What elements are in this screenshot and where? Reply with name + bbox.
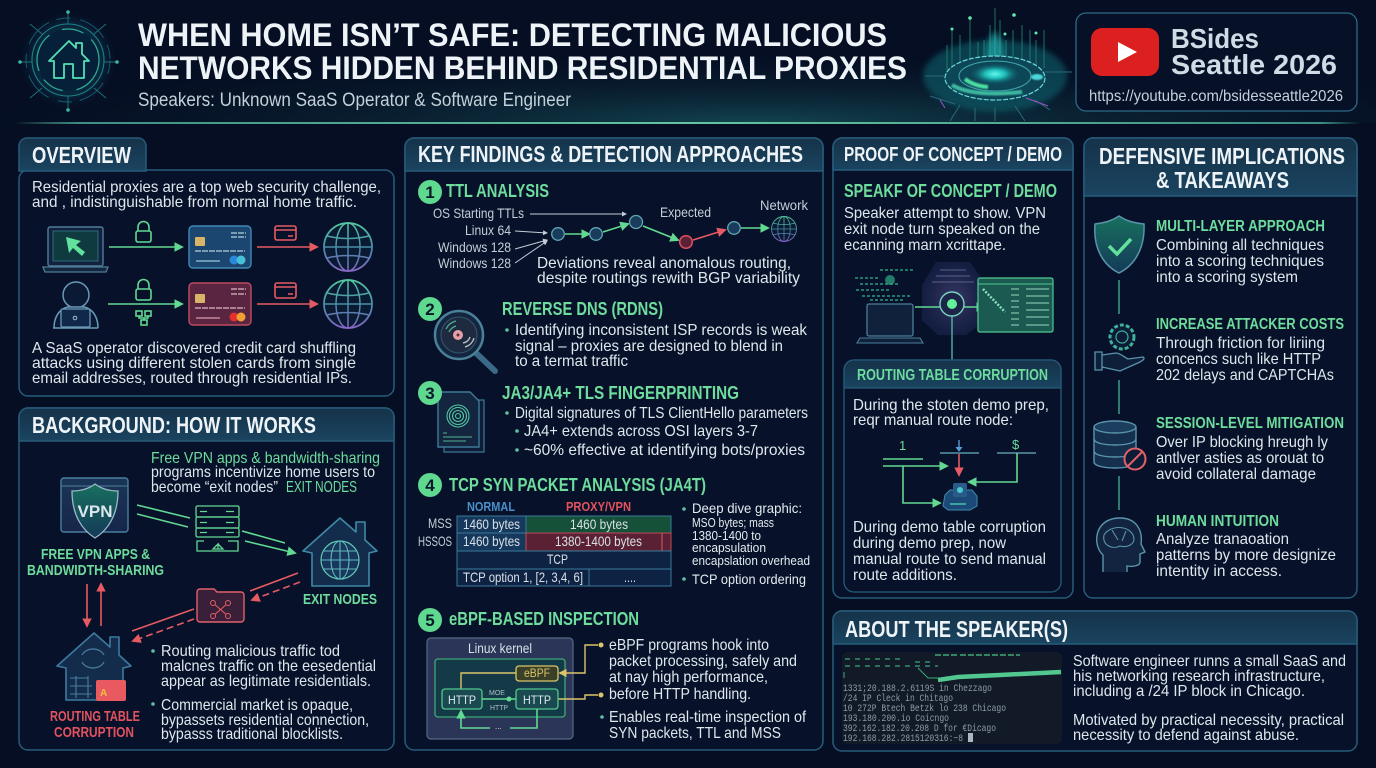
routing text bottom bbox=[853, 519, 1046, 584]
tls text bbox=[505, 405, 808, 459]
ebpf notes: before HTTP handling. bbox=[609, 686, 751, 703]
overview intro text: Residential proxies are a top web security challenge, bbox=[32, 179, 381, 196]
bullet: routing malicious traffic: appear as legitimate residentials. bbox=[161, 673, 371, 690]
finding 5: eBPF inspection bbox=[418, 608, 806, 742]
label: routing table corruption: ROUTING TABLE bbox=[50, 708, 140, 725]
channel name: BSides bbox=[1171, 23, 1259, 54]
table: normal vs proxy: 1380-1400 bytes bbox=[555, 533, 642, 549]
speaker bio: his networking research infrastructure, bbox=[1073, 668, 1325, 685]
heading: defensive implications: & TAKEAWAYS bbox=[1156, 167, 1289, 193]
routing text top: During the stoten demo prep, bbox=[853, 397, 1049, 414]
table: normal vs proxy: TCP option 1, [2, 3,4, 6] bbox=[463, 569, 583, 585]
bullet: commercial market: bypassets residential connection, bbox=[161, 712, 369, 729]
arrow: up and down exchange bbox=[87, 584, 101, 626]
badge 5 bbox=[418, 608, 442, 632]
diagram: linux kernel: HTTP bbox=[448, 693, 476, 707]
icon: laptop with cursor bbox=[43, 227, 108, 272]
icon: house in circuit ring bbox=[18, 10, 119, 112]
heading: about bbox=[833, 611, 1357, 644]
badge 2 bbox=[418, 297, 442, 321]
ebpf notes: at nay high performance, bbox=[609, 669, 768, 686]
badge 1 bbox=[418, 180, 442, 204]
subpanel: routing table corruption bbox=[844, 360, 1061, 592]
overview intro text: and , indistinguishable from normal home traffic. bbox=[32, 194, 357, 211]
heading: eBPF: eBPF-BASED INSPECTION bbox=[449, 609, 639, 629]
takeaway text: antlver asties as orouat to bbox=[1156, 450, 1324, 467]
takeaway text: MULTI-LAYER APPROACH bbox=[1156, 218, 1325, 235]
bullet: commercial market bbox=[151, 697, 369, 743]
badge 3 bbox=[418, 381, 442, 405]
ebpf notes: Enables real-time inspection of bbox=[609, 709, 806, 726]
tcp notes: TCP option ordering bbox=[692, 571, 806, 587]
TTL labels: Linux 64 bbox=[465, 222, 511, 238]
routing text top bbox=[853, 397, 1049, 429]
icon: fingerprint document bbox=[438, 392, 484, 452]
TTL labels: OS Starting TTLs bbox=[433, 205, 524, 221]
TTL labels: Network bbox=[760, 197, 809, 213]
tcp notes: encapslation overhead bbox=[692, 553, 810, 568]
overview intro text bbox=[32, 179, 381, 211]
title: WHEN HOME ISN’T SAFE: DETECTING MALICIOUS bbox=[138, 17, 887, 53]
routing text top: reqr manual route node: bbox=[853, 412, 1013, 429]
icon: small red card bbox=[275, 283, 296, 298]
badge 5: 5 bbox=[425, 611, 435, 630]
takeaway text: concencs such like HTTP bbox=[1156, 351, 1321, 368]
speaker bio bbox=[1073, 653, 1346, 744]
arrow: user to card bbox=[108, 303, 182, 305]
subheading: routing table corruption bbox=[844, 360, 1061, 388]
TTL explanation: Deviations reveal anomalous routing, bbox=[537, 255, 791, 272]
icon: lock bbox=[136, 280, 151, 300]
TTL labels bbox=[433, 197, 809, 271]
icon: globe bbox=[324, 280, 372, 328]
icon: blue credit card bbox=[189, 226, 251, 268]
icon: database blocked bbox=[1094, 421, 1146, 470]
icon: user at laptop bbox=[53, 282, 98, 328]
intro text: Free VPN apps & bandwidth-sharing bbox=[151, 450, 380, 467]
intro text bbox=[151, 450, 380, 496]
icon: maroon credit card bbox=[189, 283, 251, 325]
speaker bio: Motivated by practical necessity, practical bbox=[1073, 712, 1344, 729]
demo text bbox=[844, 205, 1046, 254]
panel: YouTube channel bbox=[1076, 13, 1357, 111]
terminal screenshot: /24 IP Cleck in Chitago bbox=[843, 693, 953, 705]
intro text: become “exit nodes” bbox=[151, 479, 278, 496]
takeaway text bbox=[1156, 415, 1344, 483]
icon: globe bbox=[324, 223, 372, 271]
diagram: linux kernel: HTTP bbox=[523, 693, 551, 707]
TTL explanation bbox=[537, 255, 800, 287]
takeaway text: Combining all techniques bbox=[1156, 237, 1324, 254]
heading: defensive implications bbox=[1084, 138, 1357, 196]
channel url: https://youtube.com/bsidesseattle2026 bbox=[1089, 88, 1343, 105]
tcp notes: encapsulation bbox=[692, 540, 766, 555]
table: normal vs proxy: PROXY/VPN bbox=[566, 499, 631, 514]
overview finding text: email addresses, routed through residential IPs. bbox=[32, 370, 352, 387]
icon: corrupted routing house: A bbox=[100, 688, 107, 699]
icon: small red card bbox=[275, 226, 296, 240]
subtitle: speakers: Speakers: Unknown SaaS Operator & Software Engineer bbox=[138, 90, 572, 111]
diagram: linux kernel: ... bbox=[495, 722, 502, 731]
takeaway text: into a scoring techniques bbox=[1156, 253, 1324, 270]
icon: shield check bbox=[1095, 216, 1144, 273]
icon: network nodes bbox=[136, 311, 151, 325]
takeaway text: avoid collateral damage bbox=[1156, 466, 1316, 483]
icon: play button bbox=[1091, 28, 1159, 76]
arrow: VPN to server bbox=[137, 505, 190, 527]
icon: head with brain bbox=[1097, 518, 1145, 572]
takeaway text bbox=[1156, 218, 1325, 286]
takeaway text: 202 delays and CAPTCHAs bbox=[1156, 367, 1334, 384]
icon: gear on hand bbox=[1095, 325, 1144, 371]
takeaway text: Over IP blocking hreugh ly bbox=[1156, 434, 1328, 451]
heading: proof of concept: PROOF OF CONCEPT / DEMO bbox=[844, 144, 1062, 166]
demo text: Speaker attempt to show. VPN bbox=[844, 205, 1046, 222]
arrow: card to globe bbox=[257, 303, 317, 305]
bullet: routing malicious traffic: malcnes traffic on the eesedential bbox=[161, 658, 376, 675]
terminal screenshot: 10 272P Btech Betzk lo 238 Chicago bbox=[843, 703, 1006, 715]
rdns text: signal – proxies are designed to blend in bbox=[515, 338, 783, 355]
tcp notes: Deep dive graphic: bbox=[692, 500, 802, 516]
heading: overview bbox=[19, 138, 146, 171]
channel name bbox=[1171, 23, 1337, 80]
overview finding text: attacks using different stolen cards from single bbox=[32, 355, 356, 372]
badge 2: 2 bbox=[425, 300, 435, 319]
terminal screenshot: 192.168.282.2815120316:~8 bbox=[843, 733, 963, 745]
bullet: routing malicious traffic bbox=[151, 643, 376, 690]
diagram: linux kernel bbox=[427, 638, 604, 739]
diagram: linux kernel: Linux kernel bbox=[468, 640, 532, 656]
arrow: laptop to card bbox=[109, 246, 182, 248]
label: free vpn apps: FREE VPN APPS & bbox=[41, 546, 150, 563]
routing text bottom: route additions. bbox=[853, 567, 957, 584]
table: normal vs proxy: 1460 bytes bbox=[570, 516, 628, 532]
TTL explanation: despite routings rewith BGP variability bbox=[537, 270, 800, 287]
demo text: exit node turn speaked on the bbox=[844, 221, 1040, 238]
ebpf notes: eBPF programs hook into bbox=[609, 637, 769, 654]
rdns text bbox=[505, 322, 808, 370]
takeaway: multi-layer approach bbox=[1095, 216, 1325, 286]
ebpf notes: packet processing, safely and bbox=[609, 653, 797, 670]
diagram: route merge: 1 bbox=[899, 438, 906, 453]
speaker bio: including a /24 IP block in Chicago. bbox=[1073, 683, 1305, 700]
speaker bio: necessity to defend against abuse. bbox=[1073, 727, 1299, 744]
rdns text: Identifying inconsistent ISP records is weak bbox=[515, 322, 808, 339]
overview finding text bbox=[32, 340, 356, 387]
tcp notes: 1380-1400 to bbox=[692, 528, 761, 543]
TTL labels: Windows 128 bbox=[438, 255, 511, 271]
takeaway text bbox=[1156, 316, 1344, 384]
icon: exit node house bbox=[303, 518, 377, 586]
tls text: Digital signatures of TLS ClientHello parameters bbox=[515, 405, 808, 422]
table: normal vs proxy: HSSOS bbox=[418, 533, 452, 549]
table: normal vs proxy: TCP bbox=[547, 551, 568, 567]
bullet: commercial market: bypasss traditional blocklists. bbox=[161, 726, 343, 743]
finding 4: TCP SYN analysis bbox=[418, 473, 810, 587]
diagram: linux kernel: eBPF bbox=[524, 666, 550, 680]
takeaway text: SESSION-LEVEL MITIGATION bbox=[1156, 415, 1344, 432]
panel: overview bbox=[19, 138, 394, 396]
header band glow bbox=[0, 0, 1376, 123]
subheading: demo: SPEAKF OF CONCEPT / DEMO bbox=[844, 181, 1057, 201]
diagram: linux kernel: HTTP bbox=[490, 705, 508, 712]
table: normal vs proxy: 1460 bytes bbox=[463, 533, 520, 549]
takeaway text: HUMAN INTUITION bbox=[1156, 513, 1279, 530]
diagram: route merge: $ bbox=[1012, 437, 1020, 452]
badge 4 bbox=[418, 473, 442, 497]
label: routing table corruption: CORRUPTION bbox=[54, 724, 134, 741]
diagram: linux kernel: MOE bbox=[489, 690, 505, 697]
icon: corrupted routing house bbox=[57, 633, 131, 701]
heading: reverse DNS: REVERSE DNS (RDNS) bbox=[502, 299, 663, 319]
takeaway: increase attacker costs bbox=[1095, 316, 1344, 384]
panel: about the speakers bbox=[833, 611, 1357, 751]
label: free vpn apps bbox=[27, 546, 164, 579]
illustration: demo laptop to exit node bbox=[855, 262, 1053, 360]
ebpf notes bbox=[600, 637, 806, 742]
title: NETWORKS HIDDEN BEHIND RESIDENTIAL PROXIES bbox=[138, 50, 907, 86]
tcp notes: MSO bytes; mass bbox=[692, 515, 774, 530]
title bbox=[138, 17, 907, 86]
icon: server rack bbox=[196, 506, 239, 551]
terminal screenshot: 193.180.200.io Coicngo bbox=[843, 713, 949, 725]
diagram: route merge bbox=[883, 437, 1036, 510]
ebpf notes: SYN packets, TTL and MSS bbox=[609, 725, 781, 742]
label: routing table corruption bbox=[50, 708, 140, 741]
finding 2: reverse DNS bbox=[418, 297, 808, 371]
badge 3: 3 bbox=[425, 384, 435, 403]
table: normal vs proxy: NORMAL bbox=[467, 499, 515, 514]
TTL labels: Expected bbox=[660, 204, 711, 220]
table: normal vs proxy bbox=[418, 499, 671, 586]
heading: overview: OVERVIEW bbox=[32, 142, 131, 168]
heading: key findings: KEY FINDINGS & DETECTION APPROACHES bbox=[418, 141, 803, 167]
terminal screenshot: 392.162.182.20.208 D for €Dicago bbox=[843, 723, 996, 735]
channel name: Seattle 2026 bbox=[1171, 49, 1337, 80]
bullet: commercial market: Commercial market is opaque, bbox=[161, 697, 353, 714]
arrow: exit nodes to folder bbox=[250, 573, 300, 600]
takeaway text: intentity in access. bbox=[1156, 563, 1282, 580]
finding 1: TTL analysis bbox=[418, 180, 809, 287]
arrow: folder to routing table bbox=[132, 609, 194, 641]
table: normal vs proxy: .... bbox=[624, 569, 636, 585]
label: exit nodes: EXIT NODES bbox=[303, 591, 377, 608]
TTL hop path chart bbox=[515, 214, 796, 263]
TTL labels: Windows 128 bbox=[438, 239, 511, 255]
heading: TCP SYN: TCP SYN PACKET ANALYSIS (JA4T) bbox=[449, 475, 706, 495]
badge 4: 4 bbox=[425, 476, 435, 495]
heading: about: ABOUT THE SPEAKER(S) bbox=[845, 616, 1068, 642]
tls text: ~60% effective at identifying bots/proxies bbox=[524, 442, 805, 459]
routing text bottom: manual route to send manual bbox=[853, 551, 1046, 568]
intro text: programs incentivize home users to bbox=[151, 464, 375, 481]
demo text: ecanning marn xcrittape. bbox=[844, 237, 1006, 254]
label: free vpn apps: BANDWIDTH-SHARING bbox=[27, 562, 164, 579]
connectors bbox=[1118, 280, 1120, 510]
takeaway text: into a scoring system bbox=[1156, 269, 1298, 286]
panel: background how it works bbox=[19, 408, 394, 750]
takeaway text: patterns by more designize bbox=[1156, 547, 1336, 564]
intro text: EXIT NODES bbox=[286, 479, 357, 496]
rdns text: to a termat traffic bbox=[515, 353, 628, 370]
table: normal vs proxy: MSS bbox=[428, 515, 452, 531]
heading: key findings bbox=[405, 138, 823, 171]
arrow: server to exit nodes bbox=[242, 531, 295, 553]
panel: key findings bbox=[405, 138, 823, 750]
heading: background: BACKGROUND: HOW IT WORKS bbox=[32, 412, 316, 438]
finding 3: TLS fingerprinting bbox=[418, 381, 808, 459]
tls text: JA4+ extends across OSI layers 3-7 bbox=[524, 423, 758, 440]
bullet: routing malicious traffic: Routing malicious traffic tod bbox=[161, 643, 340, 660]
icon: lock bbox=[136, 222, 151, 242]
takeaway text: Through friction for liriing bbox=[1156, 335, 1325, 352]
arrow: card to globe bbox=[257, 246, 317, 248]
takeaway: human intuition bbox=[1097, 513, 1336, 580]
tcp notes bbox=[682, 500, 810, 587]
icon: network folder bbox=[197, 589, 244, 622]
heading: TTL analysis: TTL ANALYSIS bbox=[446, 181, 549, 201]
terminal screenshot: 1331;20.188.2.6119S in Chezzago bbox=[843, 683, 992, 695]
heading: proof of concept bbox=[833, 138, 1073, 170]
icon: glowing data platform bbox=[923, 8, 1072, 121]
icon: VPN shield on window bbox=[61, 478, 128, 538]
terminal screenshot bbox=[842, 652, 1062, 745]
panel: proof of concept bbox=[833, 138, 1073, 598]
heading: TLS fingerprinting: JA3/JA4+ TLS FINGERPRINTING bbox=[502, 383, 739, 403]
panel: defensive implications bbox=[1084, 138, 1357, 598]
subheading: routing table corruption: ROUTING TABLE CORRUPTION bbox=[857, 367, 1048, 384]
icon: magnifier over disc bbox=[435, 311, 495, 371]
speaker bio: Software engineer runns a small SaaS and bbox=[1073, 653, 1346, 670]
badge 1: 1 bbox=[425, 183, 435, 202]
icon: VPN shield on window: VPN bbox=[78, 502, 112, 521]
table: normal vs proxy: 1460 bytes bbox=[463, 516, 520, 532]
takeaway text bbox=[1156, 513, 1336, 580]
routing text bottom: During demo table corruption bbox=[853, 519, 1046, 536]
routing text bottom: during demo prep, now bbox=[853, 535, 1006, 552]
overview finding text: A SaaS operator discovered credit card shuffling bbox=[32, 340, 356, 357]
takeaway: session-level mitigation bbox=[1094, 415, 1344, 483]
takeaway text: Analyze tranaoation bbox=[1156, 531, 1289, 548]
